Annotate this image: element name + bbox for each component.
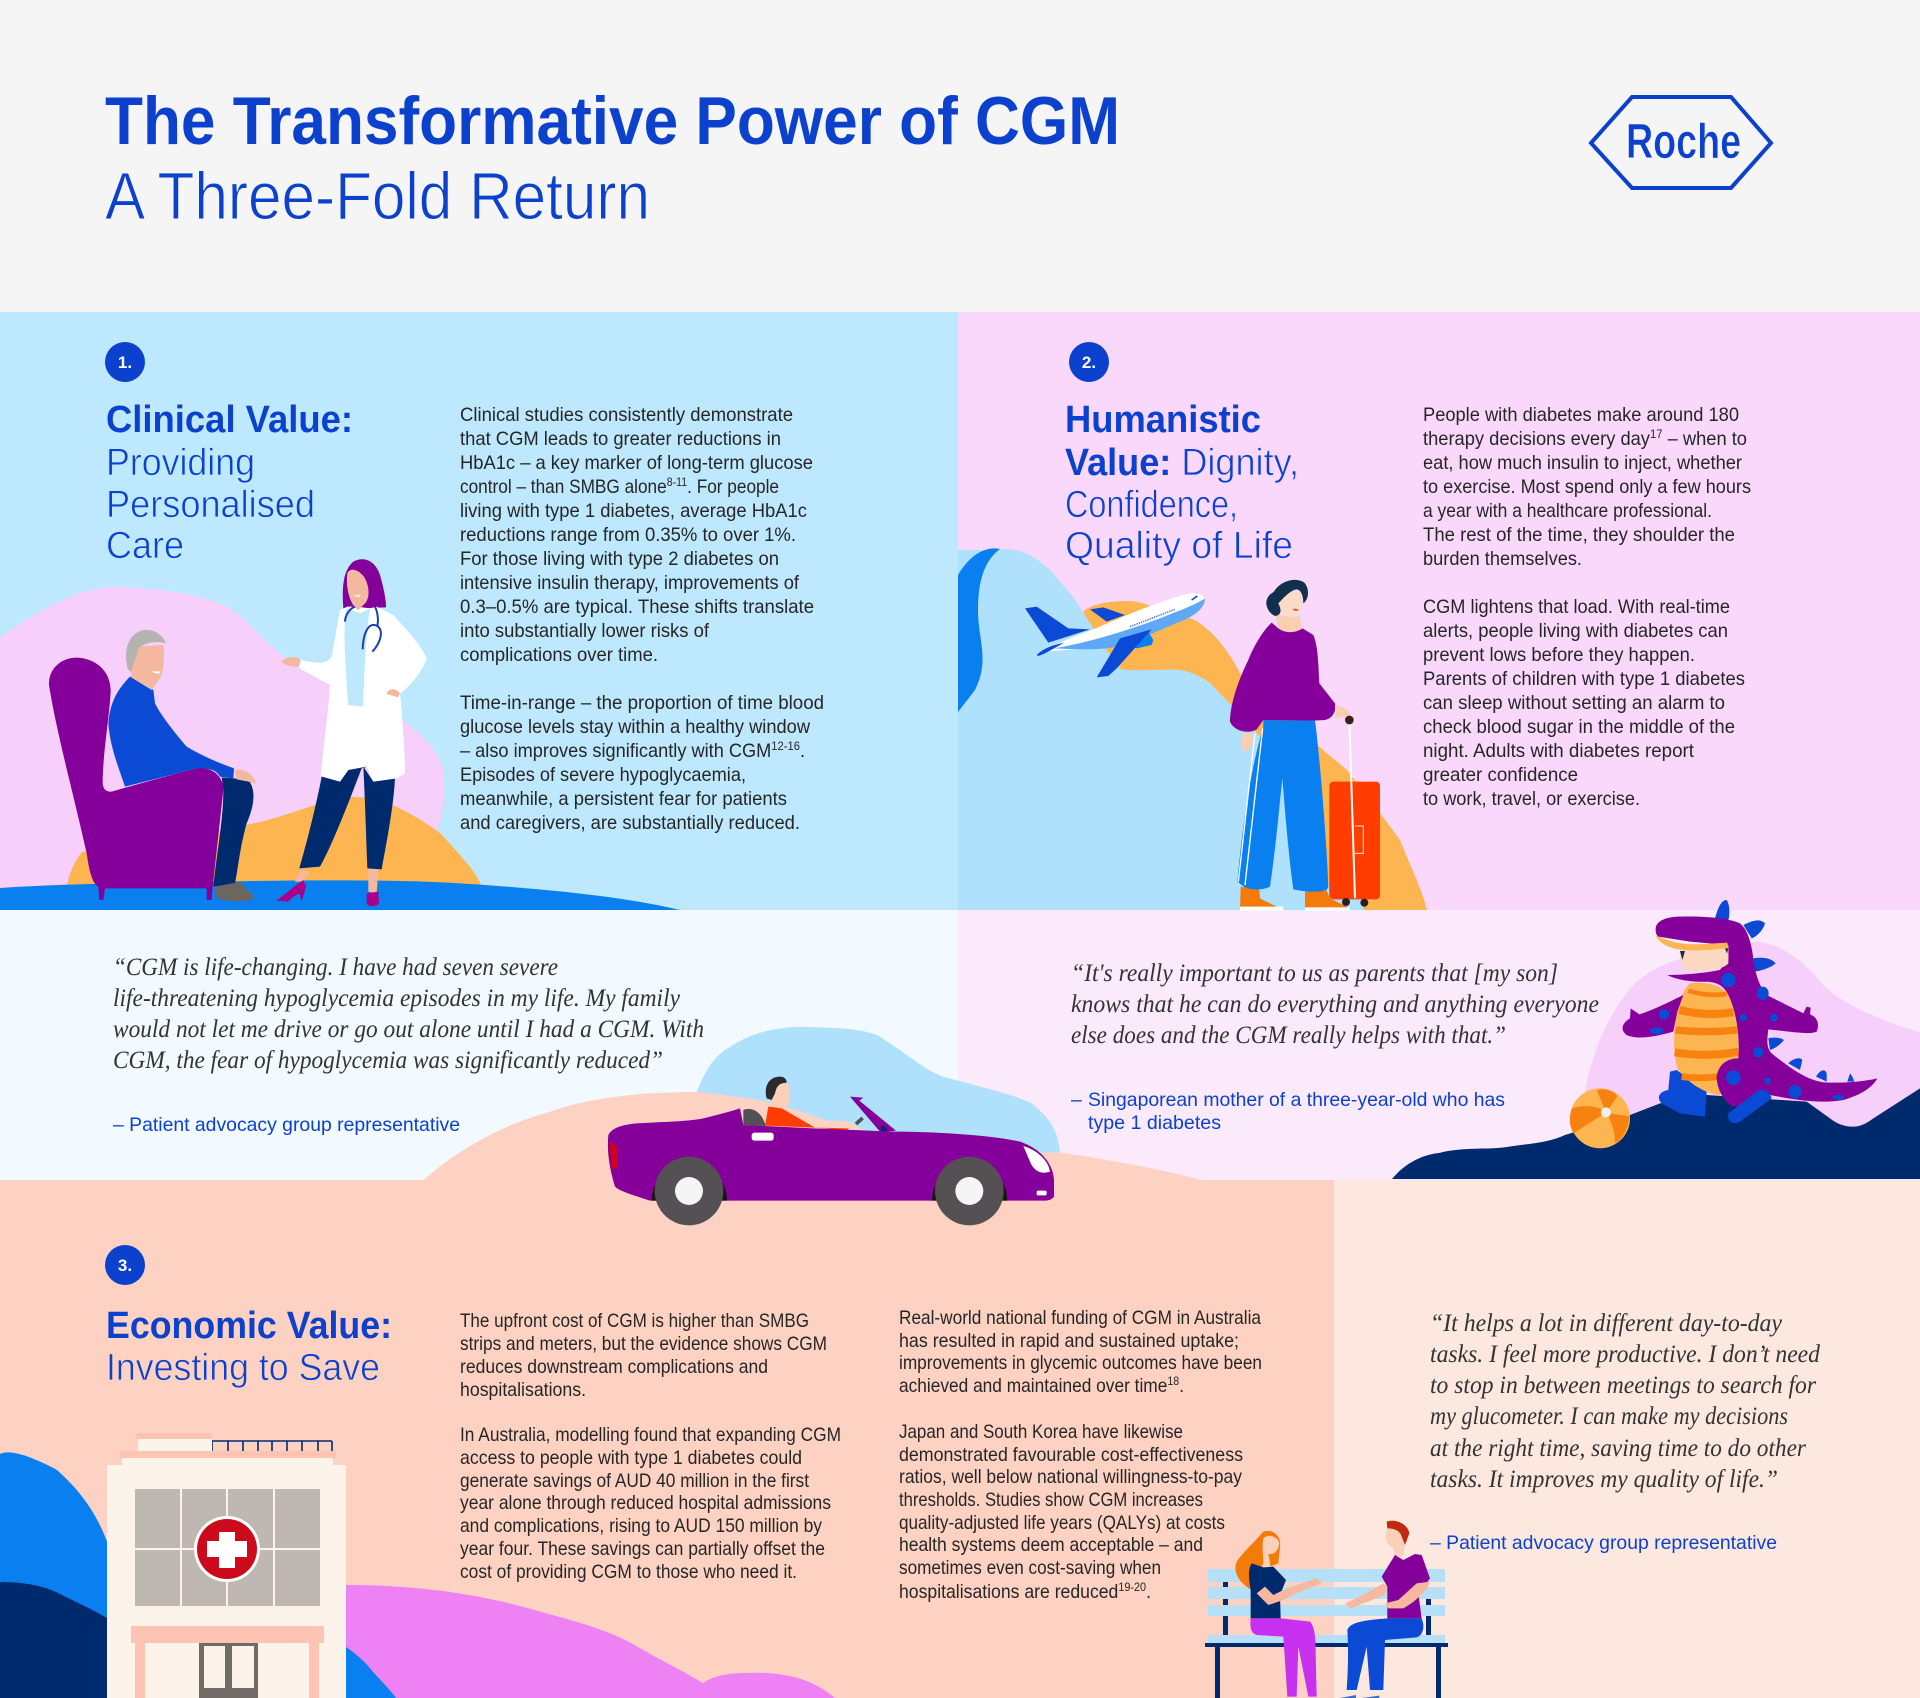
- panel: humanistic value: [958, 312, 1920, 911]
- quote: Singaporean mother: [1071, 960, 1599, 1134]
- text block: clinical value: reductions range from 0.35% to over 1%.: [460, 524, 796, 546]
- text block: economic value column 2: thresholds. Studies show CGM increases: [899, 1489, 1203, 1511]
- quote: productivity: [1430, 1310, 1820, 1554]
- text block: economic value column 1: and complications, rising to AUD 150 million by: [460, 1515, 822, 1537]
- text block: humanistic value: The rest of the time, they shoulder the: [1423, 524, 1735, 546]
- text block: clinical value: HbA1c – a key marker of long-term glucose: [460, 452, 813, 474]
- heading: clinical value: Clinical Value:: [106, 399, 353, 441]
- quote: Singaporean mother: else does and the CGM really helps with that.”: [1071, 1022, 1506, 1049]
- heading: clinical value: Care: [106, 525, 184, 567]
- badge: 2: [1069, 342, 1109, 382]
- text block: clinical value: – also improves significantly with CGM: [460, 740, 794, 762]
- text block: humanistic value: 17: [1650, 427, 1663, 441]
- quote: Singaporean mother: knows that he can do everything and anything everyone: [1071, 991, 1599, 1018]
- quote: productivity: tasks. It improves my quality of life.”: [1430, 1466, 1778, 1493]
- body: [1656, 916, 1877, 1107]
- quote: productivity: to stop in between meetings to search for: [1430, 1372, 1816, 1399]
- text block: clinical value: living with type 1 diabetes, average HbA1c: [460, 500, 807, 522]
- text block: humanistic value: therapy decisions every day: [1423, 428, 1665, 450]
- text block: economic value column 2: Japan and South Korea have likewise: [899, 1421, 1183, 1443]
- text block: economic value column 2: .: [1179, 1375, 1184, 1397]
- doctor: [276, 559, 427, 906]
- text block: economic value column 1: reduces downstream complications and: [460, 1356, 768, 1378]
- text block: clinical value: Time-in-range – the proportion of time blood: [460, 692, 824, 714]
- text block: clinical value: 0.3–0.5% are typical. These shifts translate: [460, 596, 814, 618]
- belly: [1674, 983, 1739, 1095]
- panel: economic value background: [0, 1180, 1920, 1698]
- text block: clinical value: and caregivers, are substantially reduced.: [460, 812, 800, 834]
- text block: humanistic value: to work, travel, or exercise.: [1423, 788, 1640, 810]
- armchair: [49, 658, 223, 900]
- badge: 1: 1.: [118, 353, 132, 372]
- bench: [1205, 1569, 1448, 1698]
- woman traveller: [1230, 580, 1380, 911]
- text block: economic value column 1: generate savings of AUD 40 million in the first: [460, 1470, 810, 1492]
- wheels: [652, 1157, 1007, 1225]
- quote: patient advocate on driving: [113, 954, 704, 1136]
- text block: clinical value: complications over time.: [460, 644, 658, 666]
- spots: [1650, 973, 1844, 1100]
- attribution: – Patient advocacy group representative: [1430, 1532, 1777, 1554]
- quote: patient advocate on driving: life-threatening hypoglycemia episodes in my life. My family: [113, 985, 681, 1012]
- suitcase: [1329, 716, 1380, 907]
- patient hand: [235, 770, 256, 783]
- patient head: [126, 630, 166, 690]
- text block: humanistic value: prevent lows before they happen.: [1423, 644, 1695, 666]
- text block: economic value column 1: access to people with type 1 diabetes could: [460, 1447, 802, 1469]
- text block: humanistic value: check blood sugar in the middle of the: [1423, 716, 1735, 738]
- heading: humanistic value: Value: Dignity,: [1065, 442, 1299, 484]
- title: The Transformative Power of CGM: [105, 83, 1120, 159]
- text block: clinical value: [460, 404, 824, 834]
- heading: humanistic value: [1065, 399, 1299, 567]
- illustration: convertible car: [424, 1027, 1201, 1225]
- quote: productivity: “It helps a lot in different day-to-day: [1430, 1310, 1783, 1337]
- patient torso: [108, 677, 234, 787]
- text block: economic value column 1: In Australia, modelling found that expanding CGM: [460, 1424, 841, 1446]
- attribution: type 1 diabetes: [1088, 1112, 1221, 1134]
- text block: clinical value: Clinical studies consistently demonstrate: [460, 404, 793, 426]
- plane: [1025, 593, 1205, 677]
- text block: humanistic value: [1423, 404, 1751, 810]
- text block: humanistic value: a year with a healthcare professional.: [1423, 500, 1712, 522]
- text block: humanistic value: can sleep without setting an alarm to: [1423, 692, 1725, 714]
- attribution: Singaporean mother of a three-year-old who has: [1088, 1089, 1505, 1111]
- text block: clinical value: intensive insulin therapy, improvements of: [460, 572, 800, 594]
- text block: economic value column 2: .: [1146, 1581, 1151, 1603]
- panel: clinical value: [0, 312, 958, 910]
- text block: clinical value: For those living with type 2 diabetes on: [460, 548, 779, 570]
- spikes: [1715, 900, 1854, 1082]
- red cross sign: [194, 1516, 260, 1582]
- entrance: [131, 1626, 324, 1698]
- text block: economic value column 2: quality-adjusted life years (QALYs) at costs: [899, 1512, 1225, 1534]
- logo: Roche: Roche: [1626, 115, 1741, 169]
- quote: patient advocate on driving: would not let me drive or go out alone until I had a CGM. With: [113, 1016, 704, 1043]
- heading: economic value: Economic Value:: [106, 1305, 392, 1347]
- illustration: hospital: [0, 1433, 835, 1698]
- right foot: [1728, 1090, 1772, 1123]
- text block: economic value column 2: demonstrated favourable cost-effectiveness: [899, 1444, 1243, 1466]
- heading: clinical value: Personalised: [106, 484, 315, 526]
- panel: header: [0, 0, 1920, 312]
- text block: clinical value: .: [800, 740, 805, 762]
- text block: humanistic value: greater confidence: [1423, 764, 1578, 786]
- text block: humanistic value: night. Adults with diabetes report: [1423, 740, 1695, 762]
- text block: economic value column 2: has resulted in rapid and sustained uptake;: [899, 1330, 1239, 1352]
- text block: clinical value: that CGM leads to greater reductions in: [460, 428, 781, 450]
- illustration: doctor and patient: [0, 559, 680, 910]
- text block: humanistic value: – when to: [1663, 428, 1747, 450]
- text block: humanistic value: CGM lightens that load. With real-time: [1423, 596, 1730, 618]
- text block: humanistic value: alerts, people living with diabetes can: [1423, 620, 1728, 642]
- windows: [135, 1489, 320, 1606]
- badge: 3: [105, 1245, 145, 1285]
- text block: economic value column 2: health systems deem acceptable – and: [899, 1534, 1203, 1556]
- attribution: [1071, 1089, 1505, 1134]
- quote: patient advocate on driving: CGM, the fear of hypoglycemia was significantly reduced”: [113, 1047, 663, 1074]
- badge: 2: 2.: [1082, 353, 1096, 372]
- text block: clinical value: 8-11: [667, 475, 687, 489]
- heading: humanistic value: Humanistic: [1065, 399, 1261, 441]
- text block: economic value column 1: strips and meters, but the evidence shows CGM: [460, 1333, 827, 1355]
- roof: [212, 1441, 332, 1451]
- text block: economic value column 1: year four. These savings can partially offset the: [460, 1538, 825, 1560]
- text block: clinical value: control – than SMBG alone: [460, 476, 694, 498]
- car body: [608, 1108, 1054, 1201]
- text block: economic value column 2: [899, 1307, 1262, 1603]
- text block: economic value column 2: ratios, well below national willingness-to-pay: [899, 1466, 1242, 1488]
- quote: productivity: tasks. I feel more productive. I don’t need: [1430, 1341, 1820, 1368]
- text block: clinical value: glucose levels stay within a healthy window: [460, 716, 811, 738]
- ball: [1570, 1088, 1630, 1148]
- text block: humanistic value: People with diabetes make around 180: [1423, 404, 1739, 426]
- text block: clinical value: meanwhile, a persistent fear for patients: [460, 788, 787, 810]
- text block: economic value column 2: achieved and maintained over time: [899, 1375, 1201, 1397]
- left foot: [1659, 1070, 1707, 1117]
- face: [1656, 936, 1728, 971]
- text block: economic value column 2: Real-world national funding of CGM in Australia: [899, 1307, 1261, 1329]
- patient legs and shoe: [213, 777, 254, 901]
- text block: economic value column 2: 19-20: [1118, 1580, 1146, 1594]
- text block: humanistic value: to exercise. Most spend only a few hours: [1423, 476, 1751, 498]
- quote: productivity: my glucometer. I can make my decisions: [1430, 1403, 1788, 1430]
- windshield: [850, 1097, 896, 1138]
- arm: [1623, 995, 1683, 1037]
- heading: humanistic value: Quality of Life: [1065, 525, 1293, 567]
- panel: quote backgrounds: [0, 910, 1920, 1180]
- text block: economic value column 1: year alone through reduced hospital admissions: [460, 1492, 831, 1514]
- quote: productivity: at the right time, saving time to do other: [1430, 1435, 1806, 1462]
- attribution: –: [1071, 1089, 1082, 1111]
- heading: clinical value: Providing: [106, 442, 255, 484]
- woman: [1235, 1531, 1322, 1697]
- badge: 3: 3.: [118, 1256, 132, 1275]
- heading: humanistic value: Confidence,: [1065, 484, 1238, 526]
- text block: economic value column 1: cost of providing CGM to those who need it.: [460, 1561, 797, 1583]
- illustration: two people on a bench: [1205, 1521, 1448, 1698]
- driver: [743, 1077, 863, 1131]
- patient and armchair: [49, 630, 256, 901]
- text block: clinical value: into substantially lower risks of: [460, 620, 710, 642]
- text block: economic value column 2: hospitalisations are reduced: [899, 1581, 1142, 1603]
- quote: patient advocate on driving: “CGM is life-changing. I have had seven severe: [113, 954, 558, 981]
- subtitle: A Three-Fold Return: [105, 159, 650, 234]
- illustration: traveller with plane: [958, 548, 1427, 911]
- text block: economic value column 1: The upfront cost of CGM is higher than SMBG: [460, 1310, 809, 1332]
- attribution: – Patient advocacy group representative: [113, 1114, 460, 1136]
- text block: economic value column 2: 18: [1167, 1374, 1179, 1388]
- text block: humanistic value: Parents of children with type 1 diabetes: [1423, 668, 1745, 690]
- man: [1340, 1521, 1430, 1698]
- heading: economic value: Investing to Save: [106, 1347, 380, 1389]
- logo: Roche: [1591, 97, 1771, 188]
- text block: clinical value: . For people: [687, 476, 779, 498]
- heading: economic value: [106, 1305, 392, 1389]
- text block: humanistic value: burden themselves.: [1423, 548, 1582, 570]
- badge: 1: [105, 342, 145, 382]
- text block: humanistic value: eat, how much insulin to inject, whether: [1423, 452, 1742, 474]
- text block: economic value column 1: [460, 1310, 841, 1583]
- text block: economic value column 1: hospitalisations.: [460, 1379, 586, 1401]
- text block: economic value column 2: sometimes even cost-saving when: [899, 1557, 1161, 1579]
- quote: Singaporean mother: “It's really important to us as parents that [my son]: [1071, 960, 1558, 987]
- text block: economic value column 2: improvements in glycemic outcomes have been: [899, 1352, 1262, 1374]
- text block: clinical value: Episodes of severe hypoglycaemia,: [460, 764, 746, 786]
- heading: clinical value: [106, 399, 353, 567]
- illustration: dinosaur with ball: [1392, 900, 1920, 1179]
- text block: clinical value: 12-16: [771, 739, 800, 753]
